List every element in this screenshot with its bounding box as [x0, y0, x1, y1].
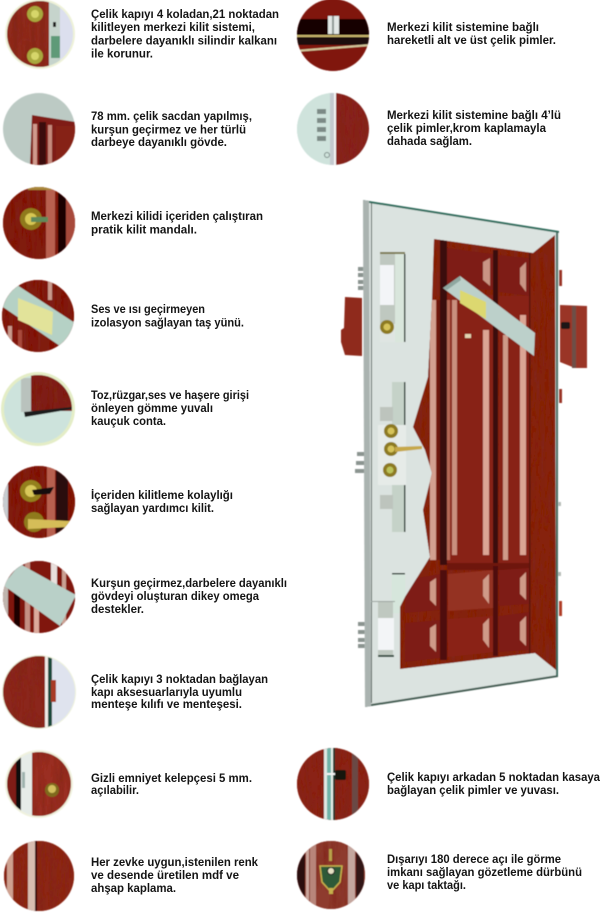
- feature: rock wool insulation: [0, 278, 244, 354]
- icon: auxiliary lock and handle: [0, 466, 80, 538]
- omega strip with rock wool: [443, 276, 535, 356]
- icon: gold latch on wood: [0, 185, 80, 261]
- description text: kurşun geçirmez ve her türlü: [91, 124, 246, 136]
- description text: 78 mm. çelik sacdan yapılmış,: [91, 110, 252, 123]
- description text: [387, 21, 556, 47]
- description text: çelik pimler,krom kaplamayla: [387, 122, 547, 135]
- description text: açılabilir.: [91, 784, 139, 797]
- description text: İçeriden kilitleme kolaylığı: [91, 489, 233, 502]
- description text: Merkezi kilidi içeriden çalıştıran: [91, 210, 263, 223]
- description text: gövdeyi oluşturan dikey omega: [91, 590, 260, 603]
- right edge hinges: [558, 270, 562, 616]
- description text: hareketli alt ve üst çelik pimler.: [387, 34, 556, 47]
- description text: ahşap kaplama.: [91, 882, 176, 895]
- left hinge block: [341, 297, 362, 356]
- description text: [91, 772, 252, 797]
- feature: hinge cover: [0, 655, 268, 729]
- icon: rock wool cutaway: [0, 278, 78, 354]
- description text: darbelere dayanıklı silindir kalkanı: [91, 34, 277, 48]
- description text: Merkezi kilit sistemine bağlı: [387, 21, 539, 34]
- description text: [91, 856, 259, 895]
- description text: [91, 673, 268, 711]
- bottom panels: row one: [405, 574, 440, 613]
- description text: [91, 110, 252, 149]
- bottom panels: row two: [405, 620, 440, 662]
- description text: dahada sağlam.: [387, 135, 472, 148]
- icon: recessed gasket: [0, 372, 76, 448]
- feature: lock latch: [0, 185, 263, 261]
- feature: moving steel pins: [296, 0, 556, 72]
- description text: Çelik kapıyı arkadan 5 noktadan kasaya: [387, 771, 600, 784]
- feature: omega supports: [0, 560, 287, 634]
- feature: rear steel pins and sockets: [296, 748, 600, 820]
- feature: rubber gasket: [0, 372, 249, 448]
- description text: ve desende üretilen mdf ve: [91, 869, 240, 882]
- description text: Toz,rüzgar,ses ve haşere girişi: [91, 389, 249, 402]
- description text: Gizli emniyet kelepçesi 5 mm.: [91, 772, 252, 785]
- long panels: [440, 240, 447, 565]
- icon: door edge with two locks: [0, 0, 75, 70]
- description text: Çelik kapıyı 4 koladan,21 noktadan: [91, 8, 279, 21]
- description text: [91, 489, 233, 515]
- left locking pins: [355, 267, 365, 648]
- description text: destekler.: [91, 603, 144, 616]
- icon: chrome pins on door edge: [296, 92, 372, 166]
- description text: imkanı sağlayan gözetleme dürbünü: [387, 866, 582, 879]
- lock cavity: middle: [378, 382, 422, 532]
- icon: omega support strip: [0, 560, 80, 634]
- icon: rear pin and socket: [296, 748, 370, 820]
- description text: izolasyon sağlayan taş yünü.: [91, 316, 244, 330]
- description text: [387, 771, 600, 797]
- icon: top and bottom steel pin: [296, 0, 370, 72]
- right hinge block: [560, 305, 587, 368]
- description text: önleyen gömme yuvalı: [91, 402, 213, 415]
- description text: kilitleyen merkezi kilit sistemi,: [91, 21, 255, 34]
- description text: kauçuk conta.: [91, 415, 166, 428]
- description text: [91, 210, 263, 236]
- description text: Her zevke uygun,istenilen renk: [91, 856, 259, 869]
- feature: peephole and knocker: [296, 840, 582, 910]
- description text: Kurşun geçirmez,darbelere dayanıklı: [91, 577, 287, 590]
- icon: wood veneer sample: [0, 840, 80, 912]
- description text: [91, 577, 287, 616]
- lock cavity: bottom: [371, 573, 405, 657]
- description text: bağlayan çelik pimler ve yuvası.: [387, 784, 559, 797]
- description text: menteşe kılıfı ve menteşesi.: [91, 698, 242, 711]
- description text: [387, 853, 582, 892]
- description text: ve kapı taktağı.: [387, 879, 466, 892]
- lock cavity: top: [380, 252, 406, 342]
- description text: [91, 389, 249, 428]
- description text: darbeye dayanıklı gövde.: [91, 136, 227, 149]
- icon: door knocker: [296, 840, 366, 910]
- description text: kapı aksesuarlarıyla uyumlu: [91, 686, 242, 699]
- keyhole: [465, 334, 471, 338]
- feature: steel body: [3, 93, 252, 166]
- description text: Dışarıyı 180 derece açı ile görme: [387, 853, 562, 866]
- feature: mdf and wood veneer: [0, 840, 259, 912]
- icon: safety clamp and lock: [0, 750, 73, 820]
- icon: steel sheet corner: [3, 93, 76, 166]
- door frame: [363, 200, 559, 707]
- feature: four chrome pins: [296, 92, 561, 166]
- description text: Çelik kapıyı 3 noktadan bağlayan: [91, 673, 268, 686]
- top panels: [447, 248, 493, 290]
- feature: central lock system: [0, 0, 279, 70]
- description text: [91, 8, 279, 60]
- description text: pratik kilit mandalı.: [91, 224, 197, 236]
- feature: hidden safety clamp: [0, 750, 252, 820]
- description text: [91, 303, 244, 330]
- door illustration: [341, 200, 587, 707]
- description text: Ses ve ısı geçirmeyen: [91, 303, 205, 316]
- description text: [387, 109, 561, 148]
- icon: hinge on door edge: [0, 655, 76, 729]
- description text: ile korunur.: [91, 48, 153, 60]
- feature: auxiliary lock: [0, 466, 233, 538]
- description text: sağlayan yardımcı kilit.: [91, 502, 214, 515]
- wooden door face: [400, 235, 556, 670]
- description text: Merkezi kilit sistemine bağlı 4’lü: [387, 109, 561, 122]
